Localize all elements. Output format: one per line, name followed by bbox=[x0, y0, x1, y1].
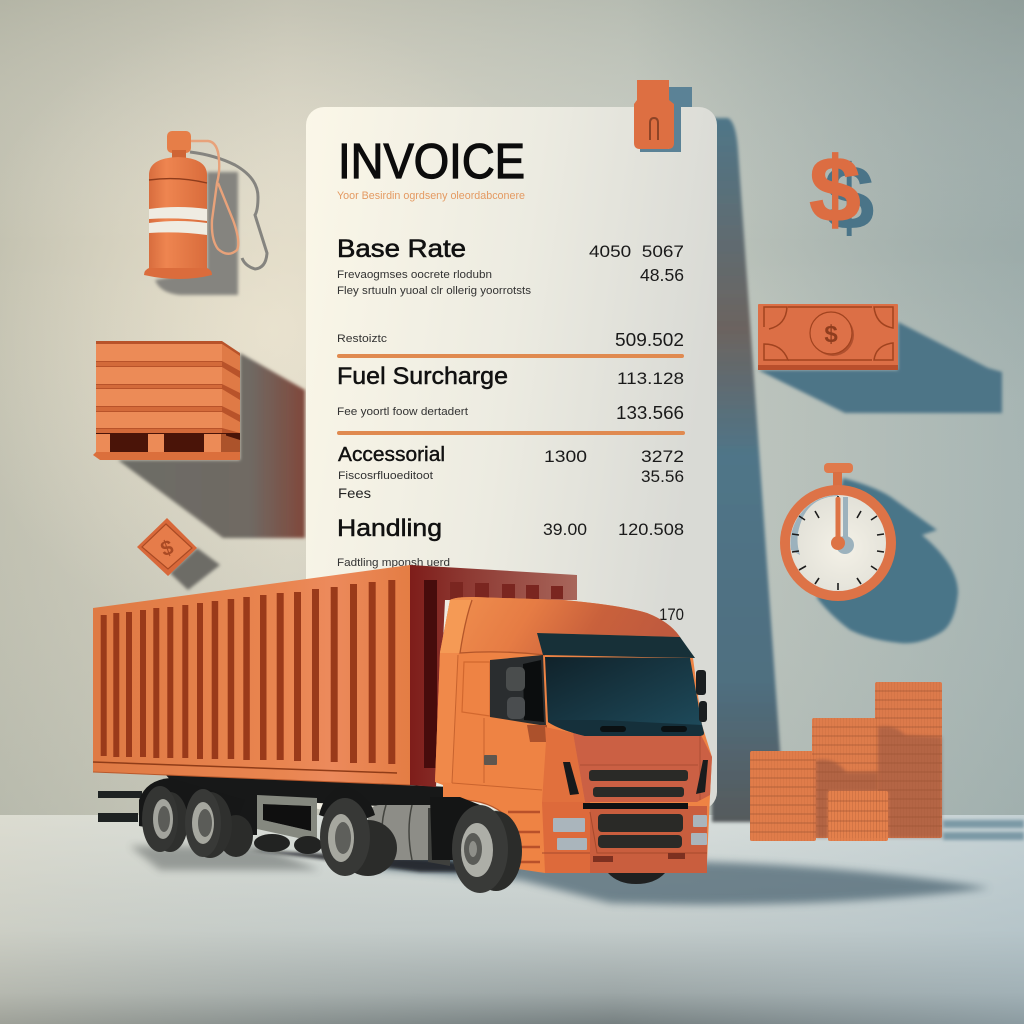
line item: handling: 120.508 bbox=[618, 520, 684, 539]
floor bbox=[0, 815, 1024, 1024]
line item: fuel surcharge: Fee yoortl foow dertadert bbox=[337, 406, 468, 418]
line item: base rate: Frevaogmses oocrete rlodubn bbox=[337, 269, 492, 281]
front wheels bbox=[430, 797, 665, 893]
line item: base rate bbox=[337, 235, 684, 350]
front grille bbox=[583, 770, 688, 848]
line item: accessorial fees: 3272 bbox=[641, 447, 684, 466]
invoice subtitle: Yoor Besirdin ogrdseny oleordabconere bbox=[337, 190, 525, 202]
line item: base rate: Restoiztc bbox=[337, 333, 388, 345]
truck bbox=[93, 565, 712, 893]
divider bbox=[337, 354, 684, 358]
trailer rear face bbox=[410, 565, 577, 787]
trailer rear bumper bbox=[98, 791, 142, 822]
line item: accessorial fees: Fiscosrfluoeditoot bbox=[338, 470, 433, 482]
line item: handling: Handling bbox=[337, 515, 442, 542]
line item: accessorial fees: 1300 bbox=[544, 447, 587, 466]
line item: base rate: 4050 5067 bbox=[589, 242, 684, 261]
cab body bbox=[435, 597, 712, 873]
rear wheels bbox=[139, 778, 397, 876]
line item: handling: Fadtling mponsh uerd bbox=[337, 557, 450, 569]
trailer side bbox=[93, 565, 410, 785]
line item: fuel surcharge: Fuel Surcharge bbox=[337, 363, 508, 390]
line item: base rate: Fley srtuuln yuoal clr ollerig yoorrotsts bbox=[337, 285, 532, 297]
line item: fuel surcharge: 133.566 bbox=[616, 403, 684, 423]
icon: dollar diamond tag: $ bbox=[158, 536, 177, 561]
invoice clip bbox=[634, 80, 692, 152]
line item: accessorial fees bbox=[338, 444, 684, 501]
chassis bbox=[165, 774, 450, 866]
line item: handling: 39.00 bbox=[543, 520, 587, 539]
invoice document bbox=[306, 80, 717, 810]
icon: coin stacks bbox=[750, 682, 942, 841]
icon: dollar diamond tag bbox=[137, 518, 197, 576]
line item: base rate: 509.502 bbox=[615, 330, 684, 350]
line item: handling: 170 bbox=[659, 605, 684, 624]
line item: handling bbox=[337, 515, 684, 624]
icon: dollar sign: $ bbox=[809, 139, 861, 241]
icon: stacked pallet bbox=[93, 341, 240, 460]
invoice cast shadow bbox=[712, 118, 785, 822]
windshield and visor bbox=[537, 633, 707, 736]
line item: base rate: Base Rate bbox=[337, 235, 466, 263]
bumper details bbox=[593, 853, 685, 862]
line item: fuel surcharge: 113.128 bbox=[617, 369, 684, 388]
door window and mirrors bbox=[490, 655, 547, 742]
invoice title: INVOICE bbox=[338, 135, 525, 189]
icon: banknote bbox=[758, 304, 898, 370]
line item: accessorial fees: Accessorial bbox=[338, 444, 445, 466]
line item: base rate: 48.56 bbox=[640, 265, 684, 285]
headlights bbox=[553, 815, 707, 850]
line item: accessorial fees: Fees bbox=[338, 485, 371, 501]
truck ground shadow bbox=[130, 846, 990, 905]
line item: fuel surcharge bbox=[337, 363, 684, 423]
cab front bbox=[542, 727, 712, 873]
divider bbox=[337, 431, 685, 435]
icon: dollar sign: $ bbox=[823, 147, 875, 249]
icon: banknote: $ bbox=[824, 321, 838, 348]
icon: fuel canister bbox=[144, 131, 238, 279]
icon: stopwatch bbox=[780, 463, 896, 601]
line item: accessorial fees: 35.56 bbox=[641, 467, 684, 486]
icon shadows on wall bbox=[118, 152, 1002, 643]
